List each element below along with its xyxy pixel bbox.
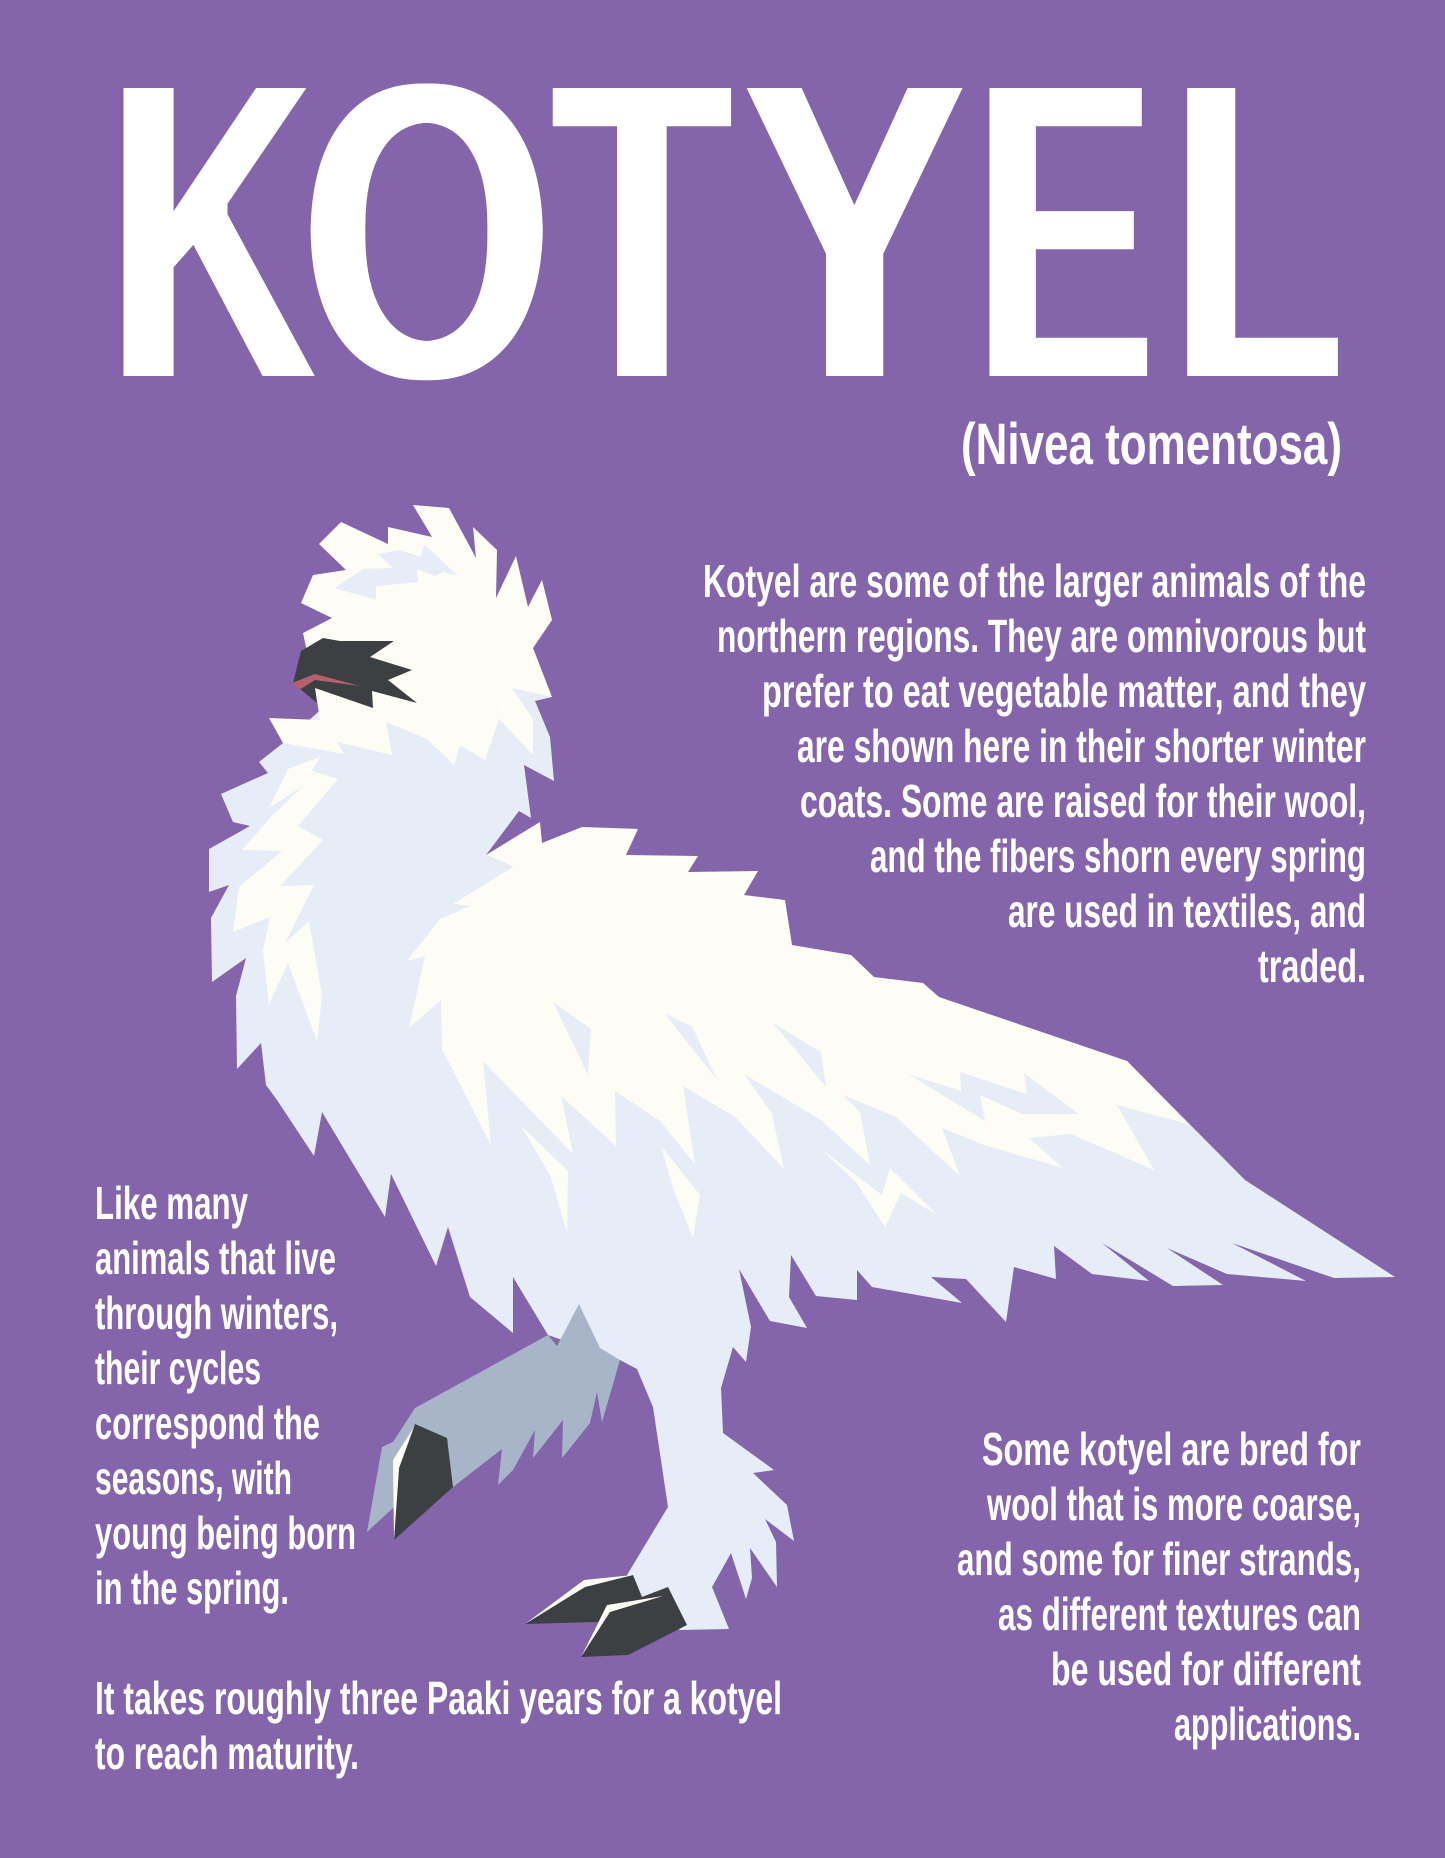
lower body fur accents [521, 1126, 936, 1238]
claw highlight two [581, 1596, 663, 1657]
head shadow tuft [335, 544, 458, 600]
title: Y [740, 0, 969, 473]
text block: description top right [703, 555, 1366, 992]
wing shadow tufts [553, 1002, 1079, 1121]
head fur [269, 505, 552, 765]
text block: description top right: traded. [1258, 940, 1366, 992]
beak [293, 638, 417, 708]
raised foot claw [394, 1424, 453, 1540]
raised claw highlight [393, 1427, 414, 1540]
text block: seasonal cycles left: correspond the [95, 1397, 320, 1449]
mouth [292, 674, 360, 690]
text block: seasonal cycles left: young being born [95, 1507, 356, 1559]
title: E [976, 0, 1154, 474]
wing fur [407, 822, 1188, 1176]
title: L [1173, 0, 1342, 474]
chest fur highlights [233, 757, 338, 1041]
title [108, 0, 1342, 474]
text block: wool textures bottom right [957, 1423, 1361, 1750]
illustration: kotyel creature [209, 505, 1395, 1657]
claw highlight one [525, 1575, 633, 1624]
kotyel body silhouette [209, 640, 1395, 1630]
text block: maturity: It takes roughly three Paaki years for a kotyel [95, 1672, 782, 1724]
title: K [108, 0, 319, 474]
text block: seasonal cycles left: Like many [95, 1177, 248, 1229]
title: O [301, 0, 552, 473]
text block: seasonal cycles left: in the spring. [95, 1562, 289, 1614]
text block: seasonal cycles left [95, 1177, 356, 1614]
text block: maturity [95, 1672, 782, 1779]
title: T [554, 0, 730, 474]
raised rear leg [367, 1304, 620, 1532]
text block: seasonal cycles left: their cycles [95, 1342, 261, 1394]
text block: seasonal cycles left: seasons, with [95, 1452, 292, 1504]
text block: seasonal cycles left: through winters, [95, 1287, 338, 1339]
text block: maturity: to reach maturity. [95, 1727, 359, 1779]
standing foot claws [525, 1575, 687, 1657]
text block: seasonal cycles left: animals that live [95, 1232, 336, 1284]
